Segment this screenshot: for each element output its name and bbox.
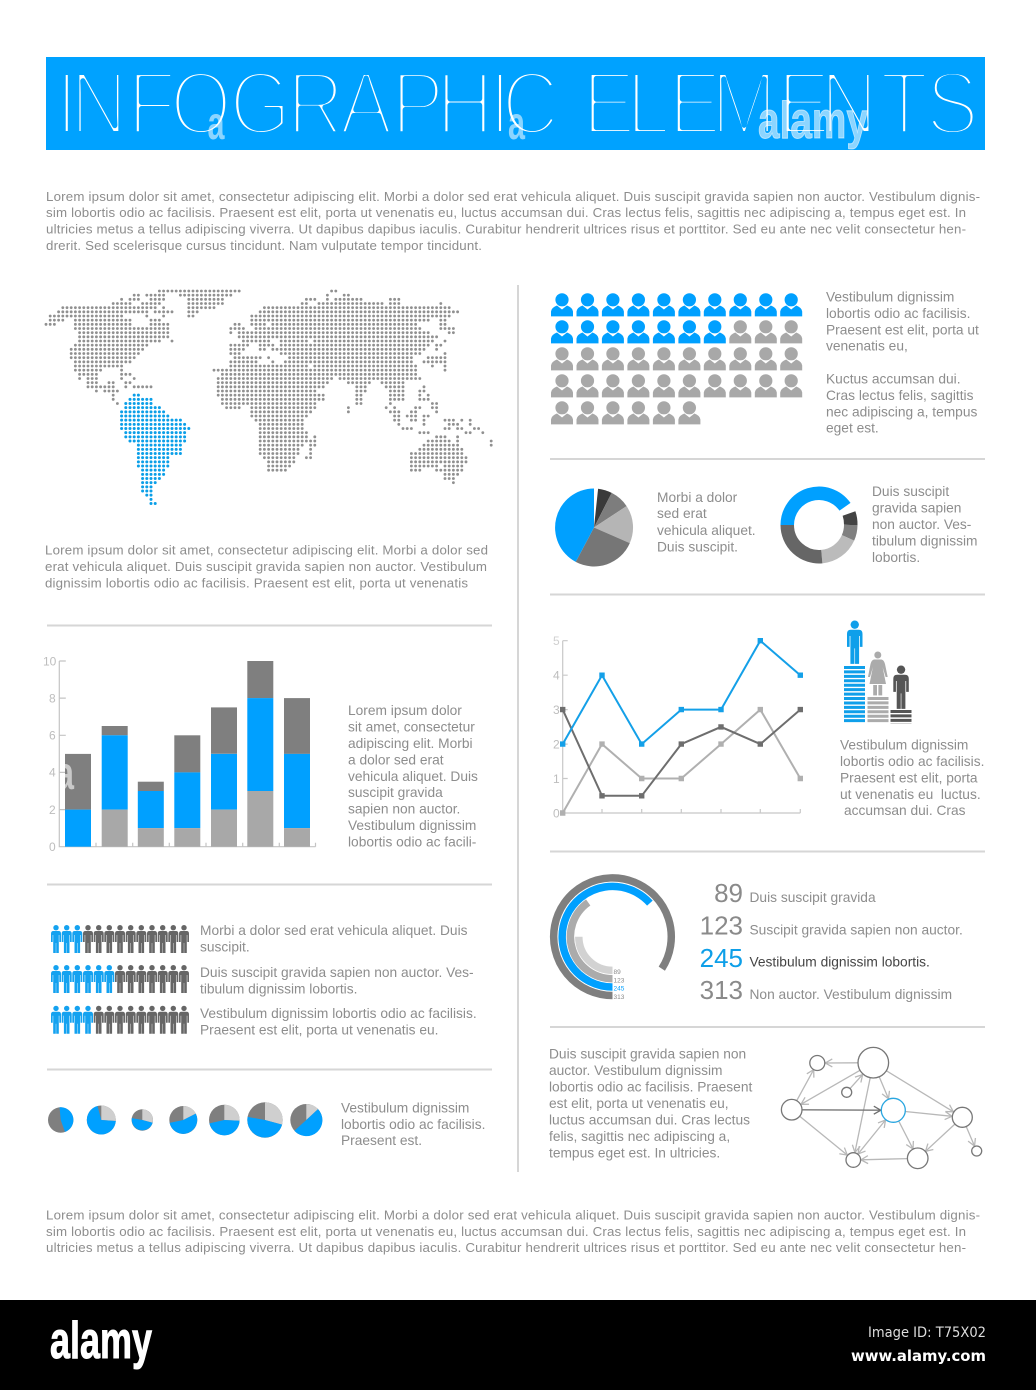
network text: luctus accumsan dui. Cras lectus bbox=[549, 1112, 750, 1128]
stat list: 123 bbox=[700, 910, 743, 940]
pie 1 bbox=[48, 1107, 73, 1133]
pie 2 bbox=[87, 1106, 116, 1134]
people grid text: Cras lectus felis, sagittis bbox=[826, 388, 974, 403]
intro text: sim lobortis odio ac facilisis. Praesent est elit, porta ut venenatis eu, luctus accumsan dui. Cras lectus felis, sagittis nec adipiscing a, tempus eget est. In bbox=[46, 205, 966, 220]
pies text: Vestibulum dignissim bbox=[341, 1100, 469, 1116]
dark grey series bbox=[560, 707, 803, 798]
footer text bbox=[46, 1208, 980, 1255]
stat list: Non auctor. Vestibulum dignissim bbox=[750, 987, 952, 1002]
people row 2 text: tibulum dignissim lobortis. bbox=[200, 982, 357, 996]
network text: lobortis odio ac facilisis. Praesent bbox=[549, 1080, 752, 1094]
donut text: lobortis. bbox=[872, 550, 920, 565]
line chart y labels: 5 bbox=[553, 634, 560, 648]
map caption: erat vehicula aliquet. Duis suscipit gravida sapien non auctor. Vestibulum bbox=[45, 559, 487, 574]
pie chart bbox=[555, 488, 633, 566]
bar chart y labels: 4 bbox=[49, 766, 56, 780]
bar chart text: suscipit gravida bbox=[348, 785, 443, 800]
people row 3 text bbox=[200, 1006, 477, 1038]
bar chart y labels: 0 bbox=[49, 840, 56, 854]
logo: alamy bbox=[50, 1312, 152, 1370]
panel: line chart bbox=[553, 620, 984, 820]
bar chart y labels: 2 bbox=[49, 803, 56, 817]
radial labels: 89 bbox=[614, 969, 621, 976]
stock photo bar bbox=[0, 1300, 1036, 1390]
line chart y labels: 4 bbox=[553, 668, 560, 682]
line chart y labels: 1 bbox=[553, 772, 560, 786]
watermark: alamy bbox=[758, 92, 868, 150]
line chart y labels: 2 bbox=[553, 738, 560, 752]
network text: est elit, porta ut venenatis eu, bbox=[549, 1096, 729, 1111]
map: highlighted South America bbox=[122, 395, 189, 504]
stat list: Vestibulum dignissim lobortis. bbox=[750, 954, 930, 970]
stat list: 245 bbox=[700, 943, 743, 973]
network text: Duis suscipit gravida sapien non bbox=[549, 1046, 746, 1062]
pie text bbox=[657, 490, 756, 554]
bar chart y labels: 8 bbox=[49, 692, 56, 706]
panel: world map bbox=[45, 291, 492, 590]
bar chart text: a dolor sed erat bbox=[348, 752, 444, 768]
bar chart text: lobortis odio ac facili- bbox=[348, 834, 476, 850]
panel: stacked bar chart bbox=[43, 654, 478, 854]
grey stack bbox=[868, 697, 888, 724]
bar chart text: vehicula aliquet. Duis bbox=[348, 769, 478, 784]
radial arcs bbox=[554, 878, 671, 996]
people grid text: venenatis eu, bbox=[826, 338, 908, 354]
radial labels: 313 bbox=[614, 994, 625, 1001]
pie text: Duis suscipit. bbox=[657, 540, 738, 554]
watermark: a bbox=[208, 97, 225, 149]
panel: small pies bbox=[48, 1100, 485, 1148]
line chart y labels: 0 bbox=[553, 806, 560, 820]
pie text: sed erat bbox=[657, 506, 707, 521]
intro text bbox=[46, 189, 980, 253]
donut text: Duis suscipit bbox=[872, 484, 949, 499]
bar chart text: sapien non auctor. bbox=[348, 802, 460, 816]
panel: pie and donut bbox=[555, 484, 977, 566]
panel: radial chart bbox=[554, 878, 963, 1005]
blue stack bbox=[844, 666, 865, 724]
people grid text: nec adipiscing a, tempus bbox=[826, 404, 977, 420]
figures on stacks bbox=[847, 620, 909, 724]
pies text: lobortis odio ac facilisis. bbox=[341, 1117, 485, 1132]
people row 3 text: Praesent est elit, porta ut venenatis eu. bbox=[200, 1022, 438, 1038]
bar chart y labels: 10 bbox=[43, 654, 57, 668]
footer text: Lorem ipsum dolor sit amet, consectetur adipiscing elit. Morbi a dolor sed erat vehicula aliquet. Duis suscipit gravida sapien non auctor. Vestibulum dignis- bbox=[46, 1208, 980, 1222]
people row 1 text bbox=[200, 923, 468, 954]
icon: grey woman bbox=[868, 652, 888, 695]
line chart y labels bbox=[553, 634, 560, 820]
image id: Image ID: T75X02 bbox=[868, 1325, 986, 1341]
bar chart text: adipiscing elit. Morbi bbox=[348, 736, 473, 751]
figures text: accumsan dui. Cras bbox=[844, 803, 966, 818]
line chart y labels: 3 bbox=[553, 703, 560, 717]
dark stack bbox=[890, 710, 912, 724]
people row 2 text: Duis suscipit gravida sapien non auctor. Ves- bbox=[200, 965, 474, 980]
people row 2 text bbox=[200, 965, 474, 996]
network edges bbox=[797, 1063, 974, 1160]
bar chart bars bbox=[56, 661, 310, 847]
icon: dark man bbox=[893, 666, 909, 709]
donut text: gravida sapien bbox=[872, 500, 961, 516]
title banner bbox=[46, 52, 985, 153]
stat list: 89 bbox=[714, 878, 743, 908]
intro text: drerit. Sed scelerisque cursus tincidunt. Nam vulputate tempor tincidunt. bbox=[46, 238, 482, 253]
network text: felis, sagittis nec adipiscing a, bbox=[549, 1129, 730, 1144]
blue series bbox=[560, 638, 803, 747]
panel: network diagram bbox=[549, 1046, 982, 1169]
people grid text: Vestibulum dignissim bbox=[826, 290, 954, 304]
network text: auctor. Vestibulum dignissim bbox=[549, 1063, 722, 1078]
pie 7 bbox=[290, 1104, 322, 1136]
intro text: ultricies metus a tellus adipiscing viverra. Ut dapibus dapibus iaculis. Curabitur hendrerit ultrices risus et porttitor. Sed eu ante nec velit consectetur hen- bbox=[46, 222, 966, 236]
line chart axes bbox=[563, 641, 800, 813]
pie 4 bbox=[169, 1106, 197, 1134]
bar chart text: Lorem ipsum dolor bbox=[348, 703, 462, 718]
people row 1 text: Morbi a dolor sed erat vehicula aliquet. Duis bbox=[200, 923, 468, 938]
figures text: ut venenatis eu luctus. bbox=[840, 787, 981, 802]
bar chart y labels: 6 bbox=[49, 728, 56, 742]
network text: tempus eget est. In ultricies. bbox=[549, 1146, 720, 1160]
bar chart text: Vestibulum dignissim bbox=[348, 818, 476, 833]
stat list bbox=[700, 878, 963, 1005]
figures text bbox=[840, 738, 984, 818]
pie 5 bbox=[209, 1105, 240, 1135]
radial labels: 245 bbox=[614, 986, 625, 992]
people grid text: Kuctus accumsan dui. bbox=[826, 372, 961, 386]
people row 3 text: Vestibulum dignissim lobortis odio ac facilisis. bbox=[200, 1006, 477, 1021]
people grid text bbox=[826, 290, 979, 436]
map caption: Lorem ipsum dolor sit amet, consectetur adipiscing elit. Morbi a dolor sed bbox=[45, 542, 488, 558]
map: grey dotted continents bbox=[46, 291, 492, 483]
icon: blue man bbox=[847, 620, 862, 664]
pies text bbox=[341, 1100, 485, 1148]
network nodes bbox=[781, 1047, 982, 1169]
donut text: tibulum dignissim bbox=[872, 534, 977, 548]
bar chart text bbox=[348, 703, 478, 850]
footer text: ultricies metus a tellus adipiscing viverra. Ut dapibus dapibus iaculis. Curabitur hendrerit ultrices risus et porttitor. Sed eu ante nec velit consectetur hen- bbox=[46, 1240, 966, 1255]
pie 3 bbox=[132, 1109, 153, 1131]
donut text: non auctor. Ves- bbox=[872, 517, 971, 532]
radial labels bbox=[614, 969, 625, 1001]
column divider bbox=[517, 285, 519, 1172]
figures text: Vestibulum dignissim bbox=[840, 738, 968, 752]
people grid text: Praesent est elit, porta ut bbox=[826, 322, 979, 338]
bar chart text: sit amet, consectetur bbox=[348, 720, 475, 734]
pies text: Praesent est. bbox=[341, 1133, 422, 1148]
bar chart bars: a bbox=[56, 747, 74, 799]
stat list: Duis suscipit gravida bbox=[750, 890, 876, 905]
bar chart axes bbox=[59, 661, 316, 847]
stat list: 313 bbox=[700, 975, 743, 1005]
light grey series bbox=[560, 707, 803, 816]
panel: people rows bbox=[51, 923, 477, 1038]
people row 1 text: suscipit. bbox=[200, 940, 250, 954]
figures text: Praesent est elit, porta bbox=[840, 770, 978, 786]
people row 3 bbox=[51, 1006, 189, 1034]
panel: pictogram of people bbox=[551, 290, 979, 436]
bar chart y labels bbox=[43, 654, 57, 854]
intro text: Lorem ipsum dolor sit amet, consectetur adipiscing elit. Morbi a dolor sed erat vehicula aliquet. Duis suscipit gravida sapien non auctor. Vestibulum dignis- bbox=[46, 189, 980, 204]
title: INFOGRAPHIC ELEMENTS bbox=[56, 52, 979, 153]
website: www.alamy.com bbox=[851, 1347, 986, 1365]
figures text: lobortis odio ac facilisis. bbox=[840, 754, 984, 769]
people row 1 bbox=[51, 925, 189, 953]
map caption bbox=[45, 542, 488, 590]
watermark: a bbox=[508, 97, 525, 149]
donut text bbox=[872, 484, 977, 565]
people row 2 bbox=[51, 965, 189, 993]
watermark bbox=[208, 92, 868, 150]
people grid text: eget est. bbox=[826, 420, 879, 436]
pie text: vehicula aliquet. bbox=[657, 523, 756, 538]
people grid text: lobortis odio ac facilisis. bbox=[826, 306, 970, 321]
map caption: dignissim lobortis odio ac facilisis. Praesent est elit, porta ut venenatis bbox=[45, 576, 468, 590]
pie text: Morbi a dolor bbox=[657, 490, 738, 505]
pie 6 bbox=[247, 1102, 283, 1138]
radial labels: 123 bbox=[614, 978, 625, 984]
donut chart bbox=[787, 493, 851, 557]
network text bbox=[549, 1046, 752, 1160]
people grid bbox=[551, 293, 802, 424]
footer text: sim lobortis odio ac facilisis. Praesent est elit, porta ut venenatis eu, luctus accumsan dui. Cras lectus felis, sagittis nec adipiscing a, tempus eget est. In bbox=[46, 1224, 966, 1239]
stat list: Suscipit gravida sapien non auctor. bbox=[750, 922, 963, 938]
